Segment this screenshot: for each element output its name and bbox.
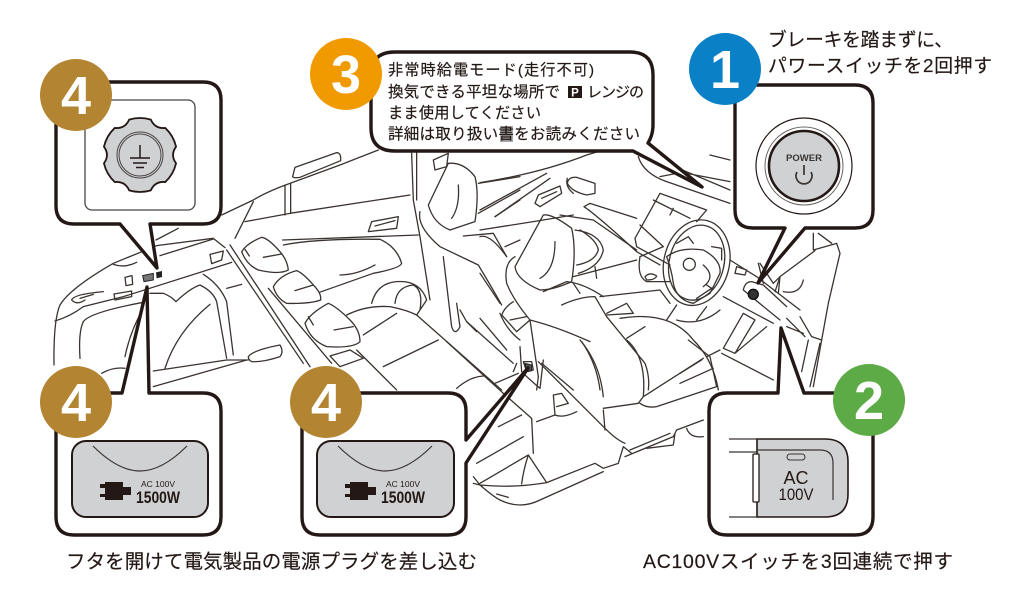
bubble text: レンジの: [587, 84, 644, 101]
icon: plug: [345, 482, 376, 500]
badge 4 lower middle: 4: [311, 373, 341, 433]
badge 4 lower middle: [290, 366, 362, 438]
bubble text: 詳細は取り扱い書をお読みください: [388, 125, 640, 143]
instruction: power switch: パワースイッチを2回押す: [768, 55, 992, 76]
outlet plate: AC 100V: [141, 479, 175, 489]
bubble text: 非常時給電モード(走行不可): [388, 62, 594, 79]
badge 2: [833, 364, 905, 436]
bubble text: まま使用してください: [388, 105, 541, 122]
badge 4 lower left: [40, 366, 112, 438]
callout 4: ground terminal panel: [56, 82, 221, 268]
badge 3: [310, 38, 382, 110]
floor and rear seat base: [447, 340, 720, 505]
icon: power button: POWER: [786, 153, 822, 164]
front door opening: [758, 233, 840, 387]
badge 4 top: [40, 59, 112, 131]
badge 4 lower left: 4: [61, 373, 91, 433]
instruction: power switch: ブレーキを踏まずに、: [768, 28, 953, 50]
outlet plate: 1500W: [381, 488, 426, 507]
outlet plate: 1500W: [136, 488, 181, 507]
caption: AC100V switch: AC100Vスイッチを3回連続で押す: [643, 551, 953, 573]
AC100V switch: [729, 439, 848, 517]
callout 4: lower left outlet panel: [56, 287, 221, 535]
AC100V switch: AC: [783, 468, 809, 488]
icon: ground knob: [104, 118, 176, 192]
bubble text: 換気できる平坦な場所で: [388, 83, 560, 101]
callout 2: AC100V switch panel: [709, 328, 873, 535]
outlet plate: [317, 441, 454, 517]
badge 2: 2: [854, 371, 884, 431]
badge 4 top: 4: [61, 66, 91, 126]
caption: plug in: フタを開けて電気製品の電源プラグを差し込む: [66, 551, 477, 573]
badge 1: 1: [710, 40, 740, 100]
bubble text: P: [571, 88, 579, 100]
callout 4: lower middle outlet panel: [302, 368, 528, 535]
badge 1: [689, 33, 761, 105]
car interior line drawing: [54, 150, 840, 505]
icon: power button: [756, 118, 852, 214]
outlet plate: [72, 441, 208, 517]
callout 1: power switch panel: [735, 85, 873, 283]
bubble text: [388, 62, 644, 143]
callout 3: text bubble: [371, 52, 702, 187]
inner frame: [85, 100, 195, 210]
AC100V switch: 100V: [778, 486, 814, 504]
icon: plug: [100, 482, 131, 500]
rear door and headrests: [222, 150, 520, 390]
badge 3: 3: [331, 45, 361, 105]
rear cargo area lines: [54, 228, 282, 387]
outlet plate: AC 100V: [386, 479, 420, 489]
front seats and dashboard: [480, 150, 800, 390]
instruction: power switch: [768, 28, 992, 76]
